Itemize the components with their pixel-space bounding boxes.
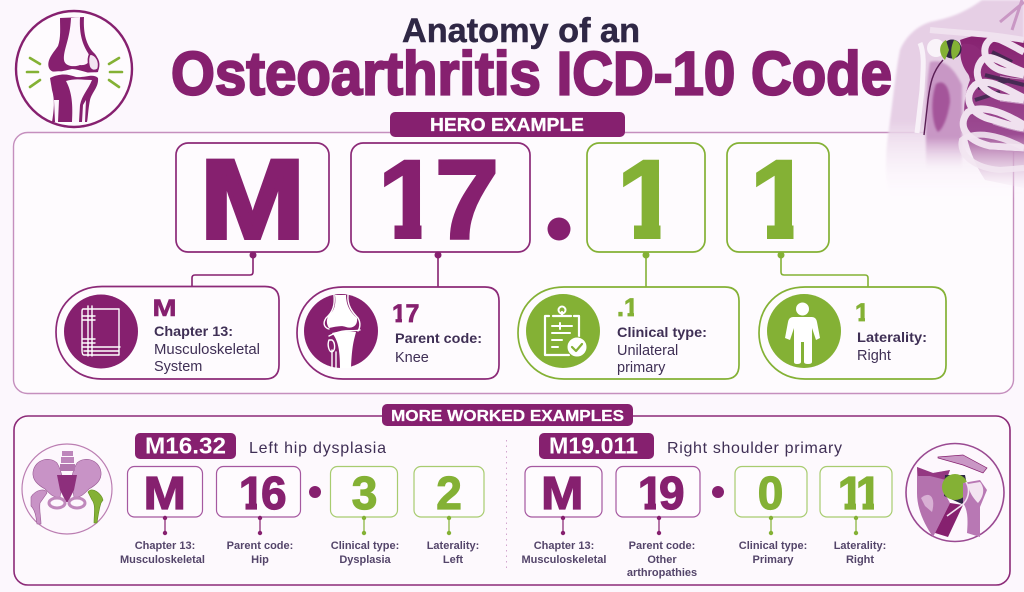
heading pill: hero example: HERO EXAMPLE (430, 115, 584, 135)
card: .1 clinical type (518, 287, 739, 379)
labels: Right (846, 554, 874, 566)
code box: 1 (727, 137, 829, 262)
labels: Chapter 13: (534, 540, 594, 552)
labels: Dysplasia (339, 554, 392, 566)
code box: 17: 7 (435, 137, 499, 262)
labels: Hip (251, 554, 269, 566)
code box: 17 (351, 137, 530, 262)
connectors (163, 516, 451, 535)
description: Right shoulder primary (667, 440, 842, 457)
box 19: 9 (659, 467, 685, 519)
dot (309, 486, 321, 498)
box 2: 2 (436, 467, 462, 519)
text: M chapter: Chapter 13: (154, 324, 233, 339)
text: 1 laterality: Right (857, 348, 891, 364)
text: 1 laterality: 1 (855, 299, 869, 327)
icon: clipboard (526, 294, 600, 368)
labels: arthropathies (627, 567, 697, 579)
icon: person (767, 294, 841, 368)
box 0 (735, 466, 807, 519)
code box: M: M (200, 137, 305, 262)
text: 17 parent code: 1 (392, 300, 406, 328)
example: M16.32: M16.32 (145, 432, 226, 458)
text: M chapter: System (154, 359, 202, 375)
text: 1 laterality (854, 299, 927, 364)
text: .1 clinical type: primary (617, 360, 666, 376)
example: M16.32 (120, 432, 484, 566)
dot (712, 486, 724, 498)
text: 17 parent code: Parent code: (395, 331, 482, 346)
box 16: 6 (261, 467, 287, 519)
text: .1 clinical type: Clinical type: (617, 325, 707, 340)
box M (525, 466, 602, 519)
labels (120, 540, 479, 566)
connectors (561, 516, 858, 535)
labels: Clinical type: (739, 540, 807, 552)
box M: M (541, 467, 584, 519)
text: .1 clinical type (617, 294, 707, 376)
text: M chapter: Musculoskeletal (154, 342, 260, 358)
box 19: 1 (638, 467, 663, 519)
panel: more worked examples (14, 416, 1010, 585)
heading pill: more worked examples: MORE WORKED EXAMPLES (391, 408, 624, 425)
box 16 (216, 466, 300, 519)
labels: Left (443, 554, 463, 566)
code pill (539, 433, 654, 459)
description: Left hip dysplasia (249, 440, 386, 457)
box 11: 1 (838, 467, 863, 519)
connector: M (192, 252, 256, 287)
example: M19.011 (522, 432, 892, 579)
heading pill: hero example (390, 112, 625, 137)
text: M chapter (152, 295, 260, 375)
illustration: shoulder joint (906, 444, 1004, 542)
box 16: 1 (239, 467, 264, 519)
labels: Clinical type: (331, 540, 399, 552)
icon: knee (304, 294, 378, 368)
labels: Laterality: (834, 540, 886, 552)
icon: book (64, 294, 138, 368)
code box: 17: 1 (378, 137, 440, 262)
labels: Musculoskeletal (522, 554, 606, 566)
box M: M (144, 467, 186, 519)
card: 17 parent code (297, 287, 499, 379)
box 2 (414, 466, 484, 519)
box 0: 0 (758, 467, 783, 519)
text: 17 parent code: 7 (406, 300, 419, 328)
decimal point (548, 218, 570, 240)
panel: hero example (14, 132, 1014, 394)
text: 17 parent code: Knee (395, 350, 429, 366)
text: .1 clinical type: .1 (617, 294, 638, 322)
example: M19.011: M19.011 (549, 432, 638, 458)
text: 1 laterality: Laterality: (857, 330, 927, 345)
labels: Other (647, 554, 677, 566)
illustration: shoulder and rib cage (886, 0, 1024, 200)
text: .1 clinical type: Unilateral (617, 343, 678, 359)
box 19 (616, 466, 700, 519)
code pill (135, 433, 236, 459)
labels: Parent code: (629, 540, 695, 552)
labels: Chapter 13: (135, 540, 195, 552)
labels: Laterality: (427, 540, 479, 552)
divider (506, 440, 508, 572)
title (171, 12, 892, 108)
text: M chapter: M (152, 295, 176, 322)
title: Osteoarthritis ICD-10 Code (171, 40, 892, 108)
code box: .1 (587, 137, 705, 262)
box 3 (330, 466, 398, 519)
labels (522, 540, 886, 579)
illustration: pelvis (22, 444, 112, 534)
card: 1 laterality (759, 287, 946, 379)
connector: 17 (434, 252, 442, 287)
text: 17 parent code (391, 300, 482, 366)
labels: Primary (753, 554, 794, 566)
heading pill: more worked examples (382, 404, 633, 426)
box 11: 1 (856, 467, 881, 519)
title: Anatomy of an (402, 12, 640, 50)
code box: 1: 1 (750, 137, 812, 262)
code box: M (176, 137, 329, 262)
connector: .1 (642, 252, 650, 287)
labels: Parent code: (227, 540, 293, 552)
connector: 1 (778, 252, 868, 287)
box 3: 3 (352, 467, 377, 519)
code box: .1: 1 (616, 137, 679, 262)
box 11 (820, 466, 892, 519)
labels: Musculoskeletal (120, 554, 205, 566)
box M (128, 466, 202, 519)
logo: knee joint in circle (16, 11, 132, 127)
card: M chapter (56, 286, 279, 379)
